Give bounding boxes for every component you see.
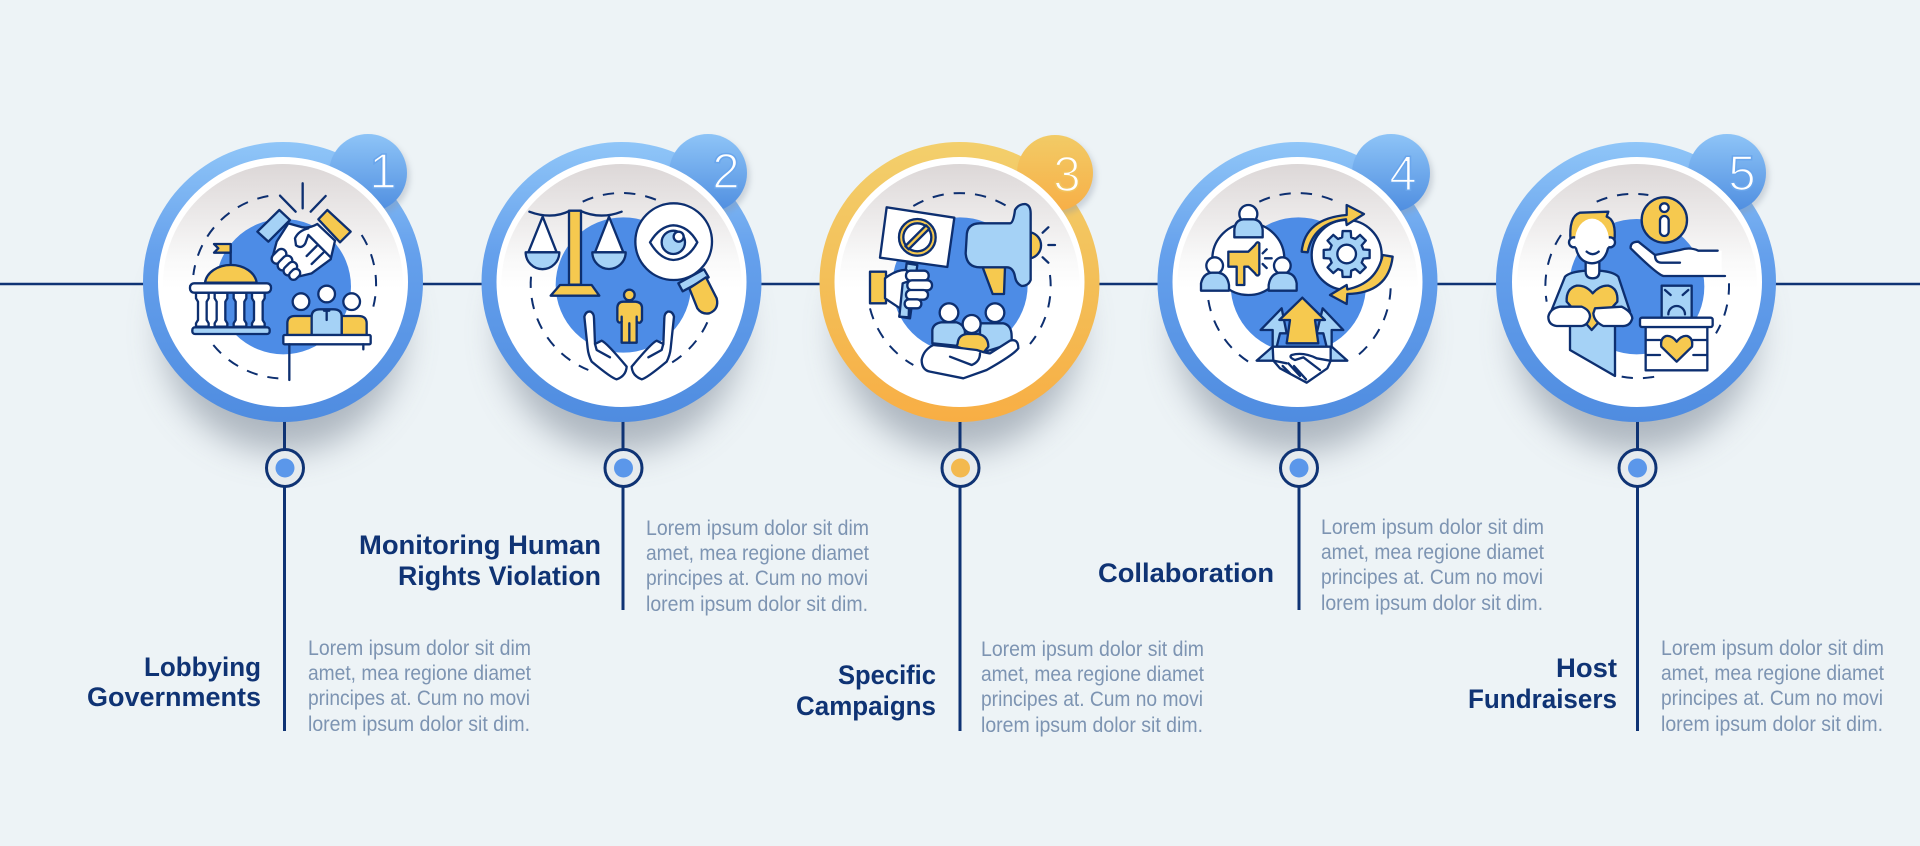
title 3 <box>796 660 936 721</box>
badge 4 <box>1352 134 1433 216</box>
step 1 <box>87 134 531 736</box>
text block 2: Lorem ipsum dolor sit dim <box>646 517 869 540</box>
badge 5 <box>1688 134 1769 216</box>
title 2 <box>359 530 601 591</box>
ring 4 <box>1158 142 1438 422</box>
text block 2: lorem ipsum dolor sit dim. <box>646 593 868 616</box>
title 3: Specific <box>838 660 936 690</box>
text block 5 <box>1661 637 1884 736</box>
text block 1 <box>308 637 531 736</box>
icon: protest sign, megaphone and people <box>870 193 1055 378</box>
text block 2 <box>646 517 869 616</box>
title 3: Campaigns <box>796 691 936 721</box>
text block 3: amet, mea regione diamet <box>981 663 1204 686</box>
text block 3 <box>981 638 1204 737</box>
step 5 <box>1468 134 1884 736</box>
text block 3: principes at. Cum no movi <box>981 688 1203 711</box>
number 2: 2 <box>712 145 740 199</box>
text block 2: amet, mea regione diamet <box>646 542 869 565</box>
disc 3 <box>834 157 1084 407</box>
icon: team, gear and growth handshake <box>1201 193 1393 383</box>
text block 1: amet, mea regione diamet <box>308 662 531 685</box>
badge 2 <box>669 134 750 216</box>
text block 4: lorem ipsum dolor sit dim. <box>1321 592 1543 615</box>
badge 1 <box>329 134 410 216</box>
connector 2 <box>605 420 642 610</box>
icon: government and handshake <box>190 183 376 380</box>
step 4 <box>1098 134 1544 615</box>
number 3: 3 <box>1053 148 1081 202</box>
connector 5 <box>1619 420 1656 731</box>
disc 4 <box>1172 157 1422 407</box>
text block 2: principes at. Cum no movi <box>646 567 868 590</box>
title 5: Host <box>1556 653 1617 683</box>
connector 1 <box>266 420 304 731</box>
title 1: Governments <box>87 682 261 712</box>
timeline horizontal line <box>0 283 1920 285</box>
connector 3 <box>942 420 979 731</box>
number 5: 5 <box>1728 147 1756 201</box>
ring 3 <box>820 142 1100 422</box>
disc 1 <box>158 157 408 407</box>
text block 1: Lorem ipsum dolor sit dim <box>308 637 531 660</box>
text block 4: amet, mea regione diamet <box>1321 541 1544 564</box>
icon: donor, information and donation box <box>1545 194 1729 378</box>
text block 4: Lorem ipsum dolor sit dim <box>1321 516 1544 539</box>
icon: scales, magnifier and hands <box>526 193 717 379</box>
text block 4: principes at. Cum no movi <box>1321 566 1543 589</box>
step 2 <box>359 134 869 616</box>
text block 4 <box>1321 516 1544 615</box>
badge 3 <box>1017 135 1096 215</box>
text block 5: lorem ipsum dolor sit dim. <box>1661 713 1883 736</box>
number 1: 1 <box>369 145 397 199</box>
title 5 <box>1468 653 1617 714</box>
title 2: Rights Violation <box>398 561 601 591</box>
text block 1: principes at. Cum no movi <box>308 687 530 710</box>
disc 5 <box>1512 157 1762 407</box>
text block 5: Lorem ipsum dolor sit dim <box>1661 637 1884 660</box>
step 3 <box>796 135 1204 737</box>
text block 3: Lorem ipsum dolor sit dim <box>981 638 1204 661</box>
title 4: Collaboration <box>1098 558 1274 588</box>
ring 2 <box>482 142 762 422</box>
title 1 <box>87 652 261 712</box>
title 1: Lobbying <box>144 652 261 682</box>
text block 3: lorem ipsum dolor sit dim. <box>981 714 1203 737</box>
disc 2 <box>496 157 746 407</box>
connector 4 <box>1280 420 1318 610</box>
title 5: Fundraisers <box>1468 684 1617 714</box>
text block 5: amet, mea regione diamet <box>1661 662 1884 685</box>
ring 5 <box>1496 142 1776 422</box>
number 4: 4 <box>1389 147 1417 201</box>
drop shadows under circles <box>163 212 1756 452</box>
text block 5: principes at. Cum no movi <box>1661 687 1883 710</box>
title 2: Monitoring Human <box>359 530 601 560</box>
text block 1: lorem ipsum dolor sit dim. <box>308 713 530 736</box>
ring 1 <box>143 142 423 422</box>
